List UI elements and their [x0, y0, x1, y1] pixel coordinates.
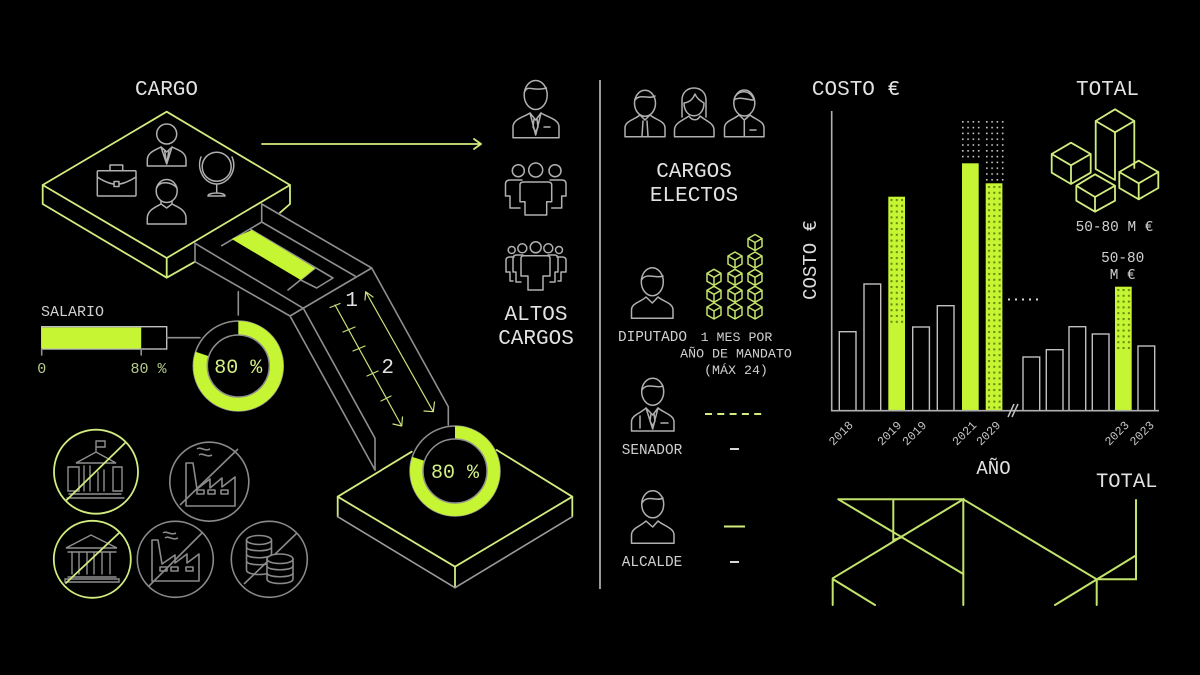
- line diagram: [833, 499, 1136, 605]
- label: total value: 50-80 M €: [1076, 220, 1153, 236]
- icon: isometric cubes: [1052, 109, 1158, 212]
- year labels: [826, 419, 1158, 449]
- arrow to roles: [262, 139, 481, 149]
- donut on bottom platform: 80 %: [431, 462, 480, 485]
- measure arrow: [365, 292, 434, 412]
- year labels: 2018: [826, 419, 857, 449]
- icon: no bank: [54, 521, 131, 598]
- icon: no factory (large): [170, 442, 249, 521]
- x axis label: AÑO: [976, 458, 1011, 480]
- dotted continuation: [1008, 298, 1041, 300]
- conveyor ramp: [195, 204, 448, 470]
- platform icons: suit, briefcase, globe, person: [97, 124, 234, 224]
- icon: no government building: [54, 430, 138, 514]
- bar chart: [832, 111, 1159, 417]
- number 2: 2: [381, 357, 394, 380]
- senador dashed value: [705, 413, 765, 415]
- icon: alcalde: [632, 491, 674, 543]
- axis label 0: 0: [37, 361, 46, 378]
- year labels: 2023: [1102, 419, 1133, 449]
- chart axes: [832, 111, 1159, 411]
- icon: person: [147, 180, 186, 224]
- year labels: 2023: [1127, 419, 1158, 449]
- heading: total: TOTAL: [1076, 79, 1139, 102]
- icon: group of three: [506, 163, 566, 215]
- y axis label: COSTO €: [800, 220, 822, 300]
- divider: [599, 80, 601, 589]
- number 1: 1: [345, 290, 358, 313]
- heading: cargos electos line two: ELECTOS: [650, 185, 738, 208]
- heading: total bottom: TOTAL: [1096, 471, 1157, 494]
- icon: diputado: [632, 268, 673, 318]
- icon: senador: [632, 378, 674, 431]
- top isometric platform: [43, 112, 290, 278]
- year labels: 2029: [974, 419, 1004, 449]
- heading: altos cargos line two: CARGOS: [498, 328, 574, 351]
- donut on bottom platform: [410, 426, 500, 516]
- year labels: 2019: [900, 419, 930, 449]
- heading: cargos electos: CARGOS: [656, 161, 732, 184]
- bottom isometric platform: [338, 450, 572, 588]
- salary label: SALARIO: [41, 304, 104, 321]
- icon: elected man with tie: [625, 90, 665, 137]
- year labels: 2019: [875, 419, 905, 449]
- heading: costo: COSTO €: [812, 79, 900, 102]
- highlighted bars: [888, 163, 1132, 411]
- icon: elected man with badge: [724, 90, 764, 137]
- ruler with ticks: [330, 304, 402, 426]
- icon: elected woman: [674, 88, 714, 137]
- bar label line two: M €: [1110, 268, 1136, 284]
- text: severance line three: (MÁX 24): [704, 363, 768, 378]
- label: diputado: DIPUTADO: [618, 330, 687, 346]
- salary bar: [42, 327, 200, 355]
- text: severance line one: 1 MES POR: [701, 330, 772, 345]
- alcalde dash: [730, 561, 739, 563]
- icon: briefcase: [97, 165, 136, 196]
- icon: no factory (small): [137, 521, 213, 597]
- label: alcalde: ALCALDE: [622, 555, 682, 571]
- icon: group of five: [506, 242, 566, 290]
- senador dash: [730, 448, 739, 450]
- icon: senior official: [513, 80, 559, 138]
- axis label 80 %: 80 %: [130, 361, 167, 378]
- axis break: [1008, 404, 1018, 417]
- icon: no coins: [231, 521, 307, 597]
- alcalde value line: [724, 526, 745, 528]
- cube stacks: [707, 234, 762, 319]
- salary donut: [193, 321, 283, 411]
- outlined bars: [839, 284, 1155, 411]
- label: senador: SENADOR: [622, 443, 683, 459]
- bar label line one: 50-80: [1101, 251, 1144, 267]
- icon: man in suit: [147, 124, 186, 166]
- dotted projection above bars: [962, 121, 1004, 181]
- heading: altos cargos: ALTOS: [504, 304, 568, 327]
- heading: cargo: CARGO: [135, 79, 198, 102]
- text: severance line two: AÑO DE MANDATO: [680, 346, 792, 362]
- salary donut: 80 %: [214, 357, 263, 380]
- icon: desk globe: [200, 152, 234, 196]
- conveyor green bar: [232, 230, 315, 280]
- year labels: 2021: [950, 419, 980, 449]
